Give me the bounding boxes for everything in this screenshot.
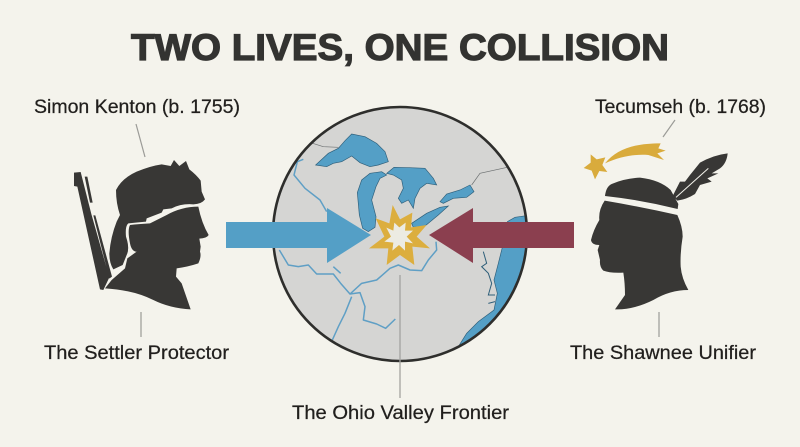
arrow: red Shawnee arrow xyxy=(429,208,574,263)
map globe xyxy=(273,107,543,361)
border lines xyxy=(313,143,507,185)
hair xyxy=(109,160,205,269)
silhouette: Tecumseh xyxy=(584,143,728,309)
rifle xyxy=(74,172,112,290)
leader line: Kenton name xyxy=(136,124,145,157)
globe outline xyxy=(273,107,527,361)
label: The Ohio Valley Frontier: The Ohio Valley Frontier xyxy=(292,403,510,424)
shooting star xyxy=(584,143,666,179)
label: The Shawnee Unifier: The Shawnee Unifier xyxy=(570,343,757,364)
leader line: Ohio Valley xyxy=(399,275,401,398)
Lake Ontario xyxy=(440,185,474,203)
leader line: Tecumseh name xyxy=(663,120,675,137)
Lake Superior xyxy=(316,134,388,167)
silhouette: Simon Kenton xyxy=(74,160,209,309)
feather xyxy=(673,153,728,201)
Lake Huron xyxy=(387,167,437,208)
title: TWO LIVES, ONE COLLISION xyxy=(131,27,669,68)
leader line: Tecumseh role xyxy=(658,312,660,337)
Chesapeake inlet xyxy=(482,252,495,303)
rivers xyxy=(279,159,437,340)
head and shoulders xyxy=(105,207,209,309)
Lake Michigan xyxy=(357,172,387,232)
label: Tecumseh: Tecumseh (b. 1768) xyxy=(595,97,766,118)
headdress top xyxy=(605,178,678,209)
Lake Erie xyxy=(412,206,448,227)
leader line: Kenton role xyxy=(140,312,142,337)
arrow: blue settler arrow xyxy=(226,208,371,263)
head and shoulders xyxy=(591,201,688,309)
label: Simon Kenton: Simon Kenton (b. 1755) xyxy=(34,97,240,118)
map water and rivers xyxy=(278,134,526,346)
infographic canvas xyxy=(34,33,765,424)
collision burst xyxy=(369,205,430,265)
label: The Settler Protector: The Settler Protector xyxy=(44,343,230,364)
Atlantic coast xyxy=(458,216,526,346)
